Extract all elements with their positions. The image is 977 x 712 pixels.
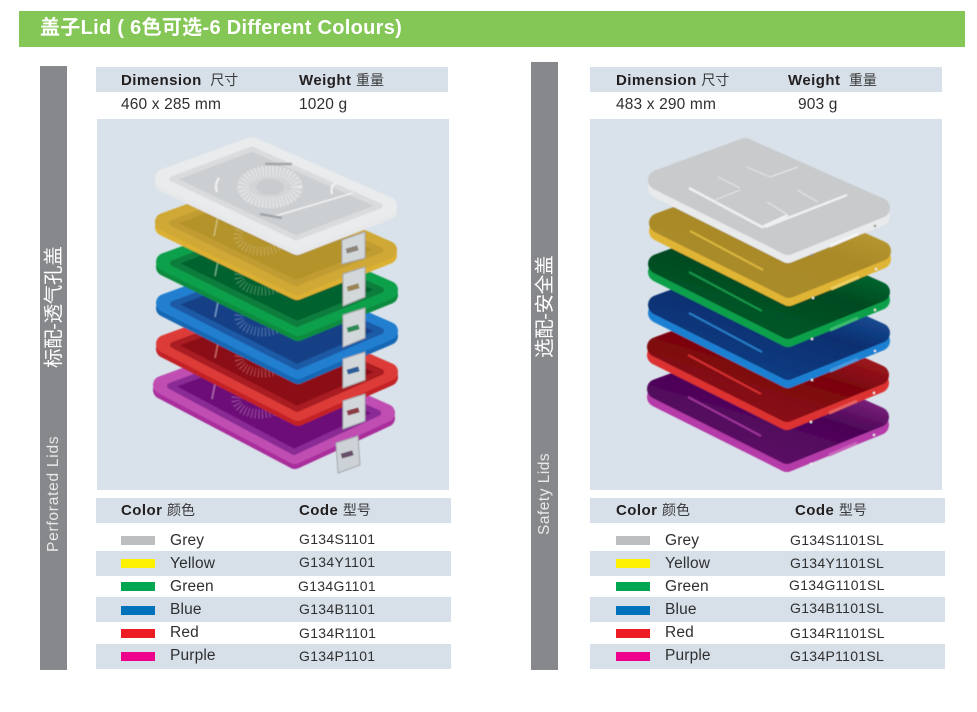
row: purple: Purple — [170, 647, 216, 664]
weight value: 903 g — [798, 96, 838, 113]
row: yellow: G134Y1101SL — [790, 555, 884, 571]
row: yellow: G134Y1101 — [299, 554, 375, 570]
sidebar label: English: Perforated Lids — [45, 436, 62, 552]
lid: blue — [165, 271, 389, 388]
row: red — [616, 624, 885, 641]
row: green: G134G1101 — [298, 578, 376, 594]
row: yellow: Yellow — [170, 555, 215, 572]
row: blue: G134B1101 — [299, 601, 375, 617]
row: yellow: Yellow — [665, 555, 710, 572]
product image: safety lid stack — [590, 119, 942, 490]
weight value: 1020 g — [299, 96, 347, 113]
lid: red — [657, 315, 879, 423]
lid: green — [165, 230, 389, 347]
sidebar label: Chinese: 选配-安全盖 — [534, 256, 556, 358]
row: red: G134R1101SL — [790, 625, 885, 641]
row: blue — [96, 597, 451, 622]
row: grey — [121, 531, 375, 549]
dimension value: 483 x 290 mm — [616, 96, 716, 113]
row: red: Red — [665, 624, 694, 641]
row: grey: G134S1101SL — [790, 532, 884, 548]
title banner — [19, 11, 965, 47]
row: yellow — [96, 551, 451, 576]
weight heading: Weight 重量 — [788, 72, 877, 89]
lid: grey perforated — [164, 146, 388, 264]
spec header — [590, 67, 942, 92]
row: grey: G134S1101 — [299, 531, 375, 547]
row: green — [121, 578, 376, 595]
product image: perforated lid stack — [97, 119, 449, 490]
row: red: G134R1101 — [299, 625, 376, 641]
color table header — [96, 498, 451, 523]
row: purple: Purple — [665, 647, 711, 664]
row: grey: Grey — [665, 532, 699, 549]
panel: safety lids — [531, 62, 945, 670]
lid: grey safety — [658, 148, 880, 256]
title text: 盖子Lid ( 6色可选-6 Different Colours) — [40, 17, 402, 39]
row: yellow — [590, 551, 945, 576]
lid: green — [658, 232, 880, 340]
code heading: Code 型号 — [795, 502, 867, 519]
color table header — [590, 498, 945, 523]
row: blue: Blue — [665, 601, 697, 618]
lid: yellow — [164, 190, 388, 306]
sidebar: perforated lids — [40, 66, 67, 670]
dimension heading: Dimension 尺寸 — [616, 72, 729, 89]
lid: purple — [162, 353, 386, 473]
color heading: Color 颜色 — [121, 502, 195, 519]
row: green — [616, 577, 885, 595]
sidebar label: English: Safety Lids — [536, 453, 553, 535]
row: purple: G134P1101SL — [790, 648, 884, 664]
panel: perforated lids — [40, 66, 451, 670]
row: blue — [590, 597, 945, 622]
lid: yellow — [659, 191, 881, 299]
lid: red — [165, 312, 389, 429]
row: grey: Grey — [170, 532, 204, 549]
row: purple — [590, 644, 945, 669]
sidebar label: Chinese: 标配-透气孔盖 — [43, 247, 65, 368]
weight heading: Weight 重量 — [299, 72, 384, 89]
dimension heading: Dimension 尺寸 — [121, 72, 238, 89]
row: purple: G134P1101 — [299, 648, 375, 664]
row: blue: G134B1101SL — [790, 600, 884, 616]
row: red — [121, 624, 376, 641]
row: grey — [616, 532, 884, 549]
row: green: Green — [665, 578, 709, 595]
row: purple — [96, 644, 451, 669]
code heading: Code 型号 — [299, 502, 371, 519]
dimension value: 460 x 285 mm — [121, 96, 221, 113]
sidebar: safety lids — [531, 62, 558, 670]
lid: purple — [657, 357, 879, 465]
color heading: Color 颜色 — [616, 502, 690, 519]
row: blue: Blue — [170, 601, 202, 618]
row: green: Green — [170, 578, 214, 595]
lid: blue — [658, 273, 880, 381]
row: red: Red — [170, 624, 199, 641]
row: green: G134G1101SL — [789, 577, 885, 593]
spec header — [96, 67, 448, 92]
